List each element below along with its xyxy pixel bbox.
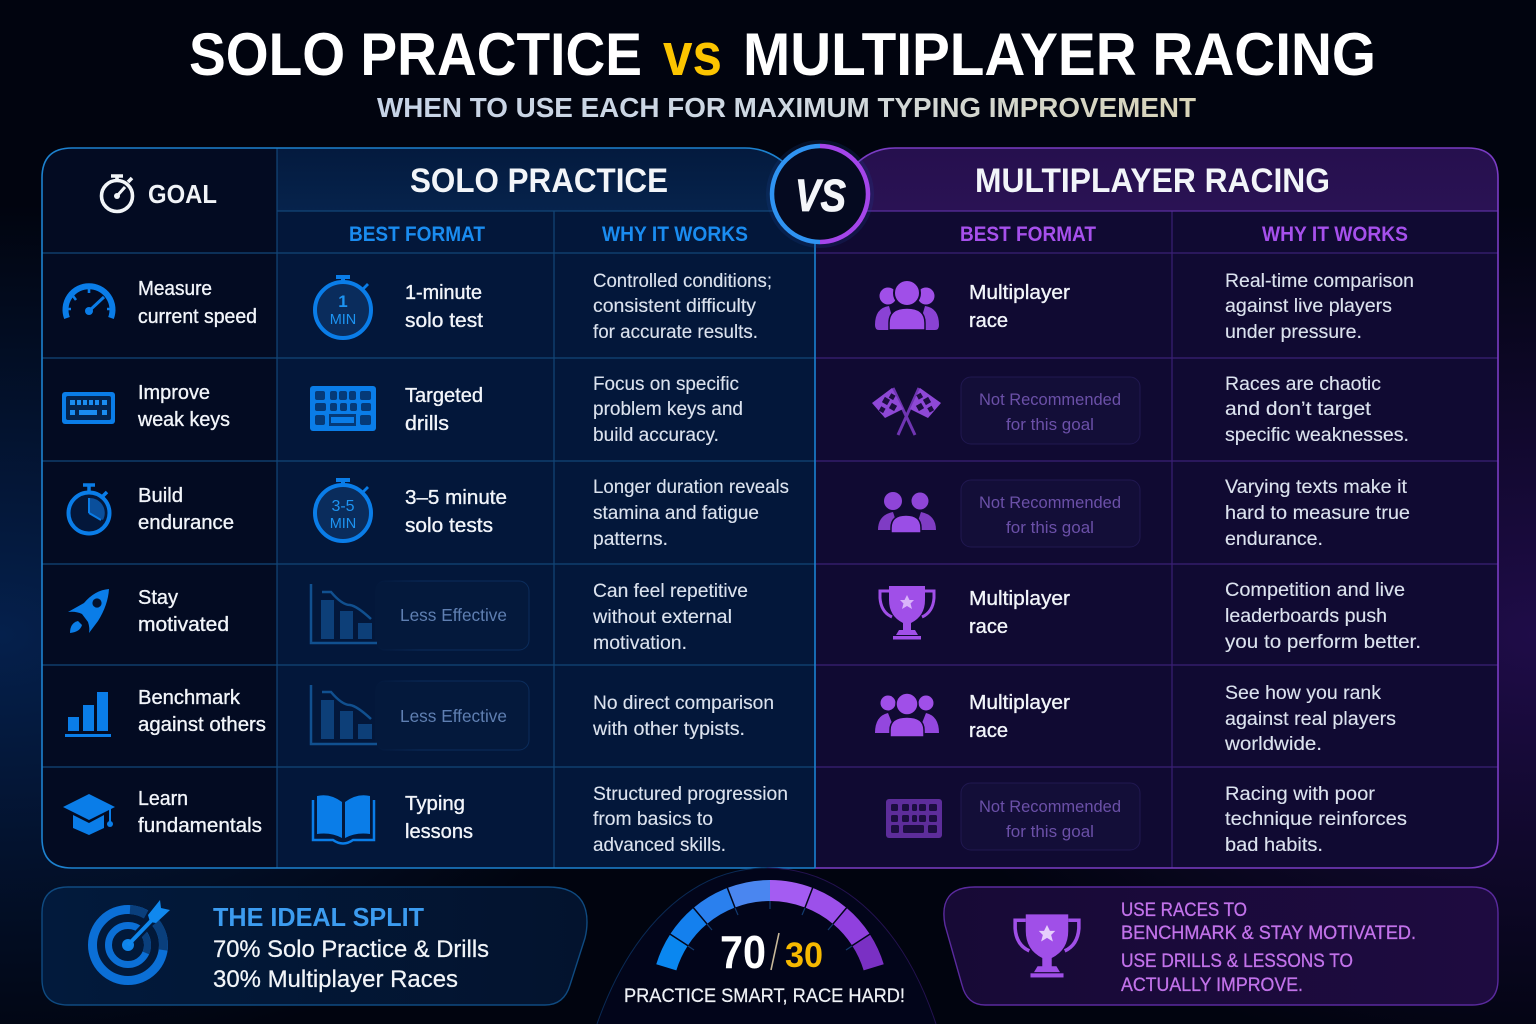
row 6: learn fundamentals: lessons — [405, 820, 473, 843]
row 5: benchmark against others — [65, 681, 1396, 755]
gauge numbers: 30 — [785, 936, 823, 975]
icon: large keyboard — [310, 386, 376, 431]
row 6: learn fundamentals: bad habits. — [1225, 835, 1323, 856]
icon: checkered flags — [872, 388, 941, 435]
callout: less effective — [375, 681, 529, 750]
panel: the ideal split: 30% Multiplayer Races — [213, 966, 458, 993]
row 2: improve weak keys: problem keys and — [593, 399, 743, 420]
row 1: measure current speed — [66, 271, 1414, 343]
row 6: learn fundamentals: Learn — [138, 787, 188, 810]
heading: multiplayer racing: MULTIPLAYER RACING — [975, 162, 1330, 200]
icon: 1 min stopwatch: MIN — [330, 312, 356, 328]
title: SOLO PRACTICE — [189, 21, 642, 88]
row 6: learn fundamentals: advanced skills. — [593, 835, 726, 856]
row 2: improve weak keys: Focus on specific — [593, 374, 739, 395]
title — [189, 21, 1376, 88]
panel: solo practice — [42, 148, 815, 868]
row 1: measure current speed: against live players — [1225, 296, 1392, 317]
gauge: 70/30 — [597, 868, 936, 1024]
row 1: measure current speed: solo test — [405, 309, 483, 332]
icon: target with arrow — [92, 900, 170, 980]
row 2: improve weak keys: Improve — [138, 381, 210, 404]
row 3: build endurance: endurance — [138, 511, 234, 534]
row 1: measure current speed: Multiplayer — [969, 281, 1070, 304]
row 1: measure current speed: 1-minute — [405, 281, 482, 304]
row 3: build endurance: 3–5 minute — [405, 486, 507, 509]
icon: open book — [313, 795, 374, 844]
row 3: build endurance: Build — [138, 484, 183, 507]
row 2: improve weak keys: and don’t target — [1225, 399, 1372, 420]
icon: three people — [875, 280, 939, 330]
row 1: measure current speed: Real-time comparison — [1225, 271, 1414, 292]
row 6: learn fundamentals: Racing with poor — [1225, 784, 1376, 805]
column headings: WHY IT WORKS — [1262, 223, 1408, 246]
panel: the ideal split: THE IDEAL SPLIT — [213, 902, 424, 932]
comparison table — [42, 140, 1498, 868]
callout: not recommended — [961, 783, 1140, 850]
row 2: improve weak keys: drills — [405, 412, 449, 435]
row 2: improve weak keys: Targeted — [405, 384, 483, 407]
icon: 3-5 min stopwatch: MIN — [330, 516, 356, 532]
icon: 3-5 min stopwatch: 3-5 — [331, 498, 355, 515]
row 3: build endurance: Varying texts make it — [1225, 477, 1408, 498]
row 2: improve weak keys — [62, 374, 1409, 446]
icon: dim keyboard — [886, 799, 942, 838]
row 4: stay motivated: Multiplayer — [969, 587, 1070, 610]
row 5: benchmark against others: worldwide. — [1224, 734, 1322, 755]
row 4: stay motivated: motivation. — [593, 633, 687, 654]
icon: three people — [875, 693, 939, 737]
center divider — [814, 236, 816, 868]
row 4: stay motivated: leaderboards push — [1225, 606, 1387, 627]
icon: 3-5 min stopwatch — [315, 478, 371, 541]
panel: use races and drills: ACTUALLY IMPROVE. — [1121, 975, 1303, 996]
vs badge: VS — [795, 170, 846, 221]
callout: less effective: Less Effective — [400, 706, 507, 726]
row 4: stay motivated: Competition and live — [1225, 580, 1405, 601]
row 5: benchmark against others: No direct comparison — [593, 693, 774, 714]
row 6: learn fundamentals: technique reinforces — [1225, 809, 1407, 830]
row 2: improve weak keys: build accuracy. — [593, 425, 719, 446]
row 1: measure current speed: for accurate results. — [593, 322, 758, 343]
icon: stopwatch — [68, 485, 110, 534]
panel: the ideal split: 70% Solo Practice & Drills — [213, 936, 489, 963]
row 5: benchmark against others: Benchmark — [138, 686, 241, 709]
row 4: stay motivated: you to perform better. — [1225, 632, 1421, 653]
row 6: learn fundamentals: from basics to — [593, 809, 713, 830]
title: vs — [663, 21, 722, 88]
icon: 1 min stopwatch — [315, 275, 371, 338]
column headings — [349, 223, 1408, 246]
subtitle: WHEN TO USE EACH FOR MAXIMUM TYPING IMPROVEMENT — [377, 92, 1196, 123]
icon: trophy — [1015, 914, 1079, 977]
row 4: stay motivated: motivated — [138, 613, 229, 636]
row 5: benchmark against others: with other typists. — [592, 719, 745, 740]
callout: not recommended: for this goal — [1006, 415, 1094, 434]
callout: not recommended — [961, 480, 1140, 547]
icon: declining chart — [311, 584, 377, 643]
panel: use races and drills: USE RACES TO — [1121, 900, 1247, 921]
row 5: benchmark against others: against real players — [1225, 709, 1396, 730]
row 1: measure current speed: Measure — [138, 277, 212, 300]
row 3: build endurance: hard to measure true — [1225, 503, 1410, 524]
heading: solo practice: SOLO PRACTICE — [410, 162, 668, 200]
row 1: measure current speed: consistent difficulty — [593, 296, 757, 317]
icon: declining chart — [311, 685, 377, 744]
icon: small keyboard — [62, 392, 115, 424]
row 3: build endurance — [68, 477, 1410, 550]
callout: less effective: Less Effective — [400, 605, 507, 625]
column headings: BEST FORMAT — [349, 223, 485, 246]
header: goal — [102, 176, 217, 212]
panel: use races and drills — [944, 887, 1498, 1005]
row 4: stay motivated: Stay — [138, 586, 179, 609]
row 3: build endurance: endurance. — [1225, 529, 1323, 550]
gauge numbers: 70 — [720, 926, 766, 978]
gauge numbers — [720, 926, 823, 978]
row 6: learn fundamentals: Structured progression — [593, 784, 788, 805]
icon: graduation cap — [63, 794, 115, 835]
icon: two people — [878, 492, 936, 533]
row 4: stay motivated: without external — [592, 607, 732, 628]
row 6: learn fundamentals: Typing — [405, 792, 465, 815]
row 6: learn fundamentals: fundamentals — [138, 814, 262, 837]
row 4: stay motivated: race — [969, 615, 1008, 638]
column headings: WHY IT WORKS — [602, 223, 748, 246]
icon: 1 min stopwatch: 1 — [338, 292, 348, 311]
callout: not recommended: Not Recommended — [979, 493, 1121, 512]
panel: the ideal split — [42, 887, 587, 1005]
icon: trophy — [880, 586, 934, 640]
row 5: benchmark against others: against others — [138, 713, 266, 736]
row 5: benchmark against others: Multiplayer — [969, 691, 1070, 714]
row 1: measure current speed: under pressure. — [1225, 322, 1362, 343]
row 1: measure current speed: Controlled conditions; — [593, 271, 772, 292]
callout: not recommended: Not Recommended — [979, 390, 1121, 409]
row 3: build endurance: solo tests — [405, 514, 493, 537]
callout: not recommended — [961, 377, 1140, 444]
callout: not recommended: for this goal — [1006, 518, 1094, 537]
gauge arc — [666, 887, 874, 967]
column headings: BEST FORMAT — [960, 223, 1096, 246]
row 5: benchmark against others: See how you rank — [1225, 683, 1382, 704]
row 3: build endurance: patterns. — [593, 529, 668, 550]
icon: rocket — [68, 589, 109, 633]
row 5: benchmark against others: race — [969, 719, 1008, 742]
row 4: stay motivated — [68, 580, 1421, 654]
row 1: measure current speed: current speed — [138, 305, 257, 328]
callout: less effective — [375, 581, 529, 650]
icon: stopwatch goal — [102, 176, 132, 212]
callout: not recommended: for this goal — [1006, 822, 1094, 841]
title: MULTIPLAYER RACING — [743, 21, 1376, 88]
panel: use races and drills: BENCHMARK & STAY MOTIVATED. — [1121, 923, 1416, 944]
icon: speedometer — [66, 286, 112, 318]
row 4: stay motivated: Can feel repetitive — [593, 581, 748, 602]
gauge: 70/30: PRACTICE SMART, RACE HARD! — [624, 986, 905, 1007]
row 2: improve weak keys: Races are chaotic — [1225, 374, 1381, 395]
vs badge — [766, 140, 874, 248]
callout: not recommended: Not Recommended — [979, 797, 1121, 816]
icon: bar chart — [65, 692, 111, 737]
row 3: build endurance: stamina and fatigue — [593, 503, 759, 524]
row 1: measure current speed: race — [969, 309, 1008, 332]
panel: use races and drills: USE DRILLS & LESSONS TO — [1121, 951, 1353, 972]
panel: multiplayer racing — [815, 148, 1498, 868]
row 6: learn fundamentals — [63, 783, 1407, 856]
header: goal: GOAL — [148, 179, 217, 209]
row 2: improve weak keys: weak keys — [137, 408, 230, 431]
row 2: improve weak keys: specific weaknesses. — [1225, 425, 1409, 446]
row 3: build endurance: Longer duration reveals — [593, 477, 789, 498]
